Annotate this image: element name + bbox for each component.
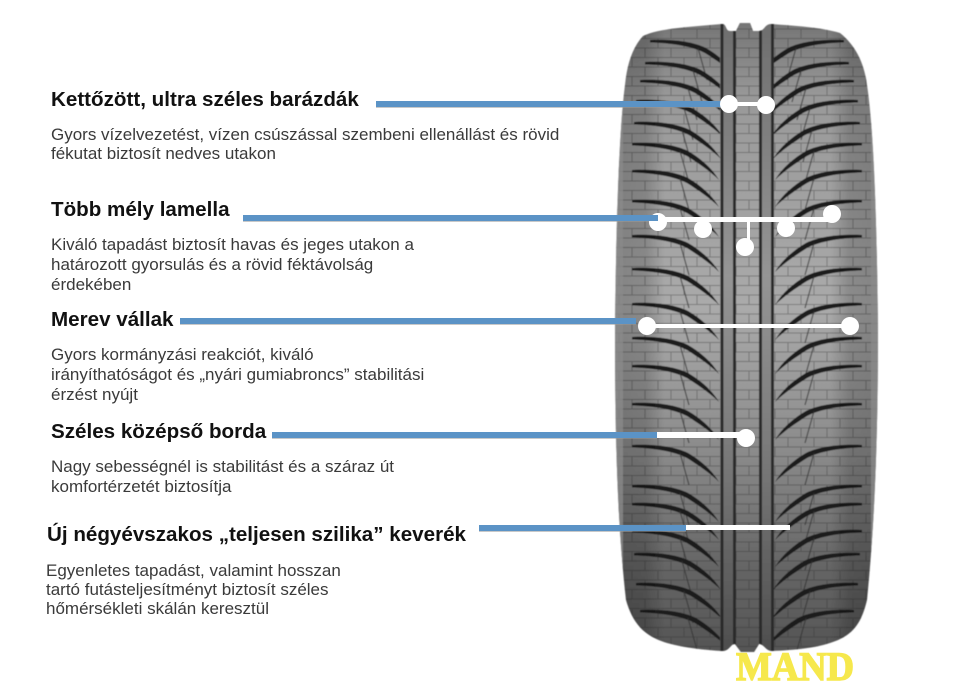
description: érdekében: [51, 275, 131, 294]
description: Kiváló tapadást biztosít havas és jeges utakon a: [51, 235, 414, 254]
leader line: [479, 525, 790, 532]
leader line: [376, 95, 775, 114]
description: komfortérzetét biztosítja: [51, 477, 232, 496]
callout 1: double grooves: [51, 88, 775, 163]
description: határozott gyorsulás és a rövid féktávolság: [51, 255, 373, 274]
description: érzést nyújt: [51, 385, 138, 404]
description: hőmérsékleti skálán keresztül: [46, 599, 269, 618]
description: Gyors vízelvezetést, vízen csúszással szembeni ellenállást és rövid: [51, 125, 559, 144]
description: Gyors kormányzási reakciót, kiváló: [51, 345, 314, 364]
description: fékutat biztosít nedves utakon: [51, 144, 276, 163]
sidewall edges: [615, 114, 624, 566]
description: irányíthatóságot és „nyári gumiabroncs” stabilitási: [51, 365, 424, 384]
callout 5: silica compound: [46, 522, 790, 618]
circumferential grooves: [720, 20, 774, 660]
leader line: [272, 429, 755, 447]
description: Egyenletes tapadást, valamint hosszan: [46, 561, 341, 580]
callout 3: stiff shoulders: [51, 308, 859, 404]
heading: Széles középső borda: [51, 420, 267, 443]
heading: Merev vállak: [51, 308, 174, 331]
tire: [610, 20, 885, 660]
heading: Több mély lamella: [51, 198, 230, 221]
leader line: [180, 317, 859, 335]
leader line: [243, 205, 841, 256]
tread grooves right: [773, 39, 862, 650]
callout 2: sipes: [51, 198, 841, 294]
heading: Kettőzött, ultra széles barázdák: [51, 88, 359, 111]
callout 4: wide centre rib: [51, 420, 755, 496]
description: Nagy sebességnél is stabilitást és a száraz út: [51, 457, 394, 476]
tread grooves left: [632, 39, 721, 649]
description: tartó futásteljesítményt biztosít széles: [46, 580, 329, 599]
heading: Új négyévszakos „teljesen szilika” keverék: [47, 522, 467, 546]
